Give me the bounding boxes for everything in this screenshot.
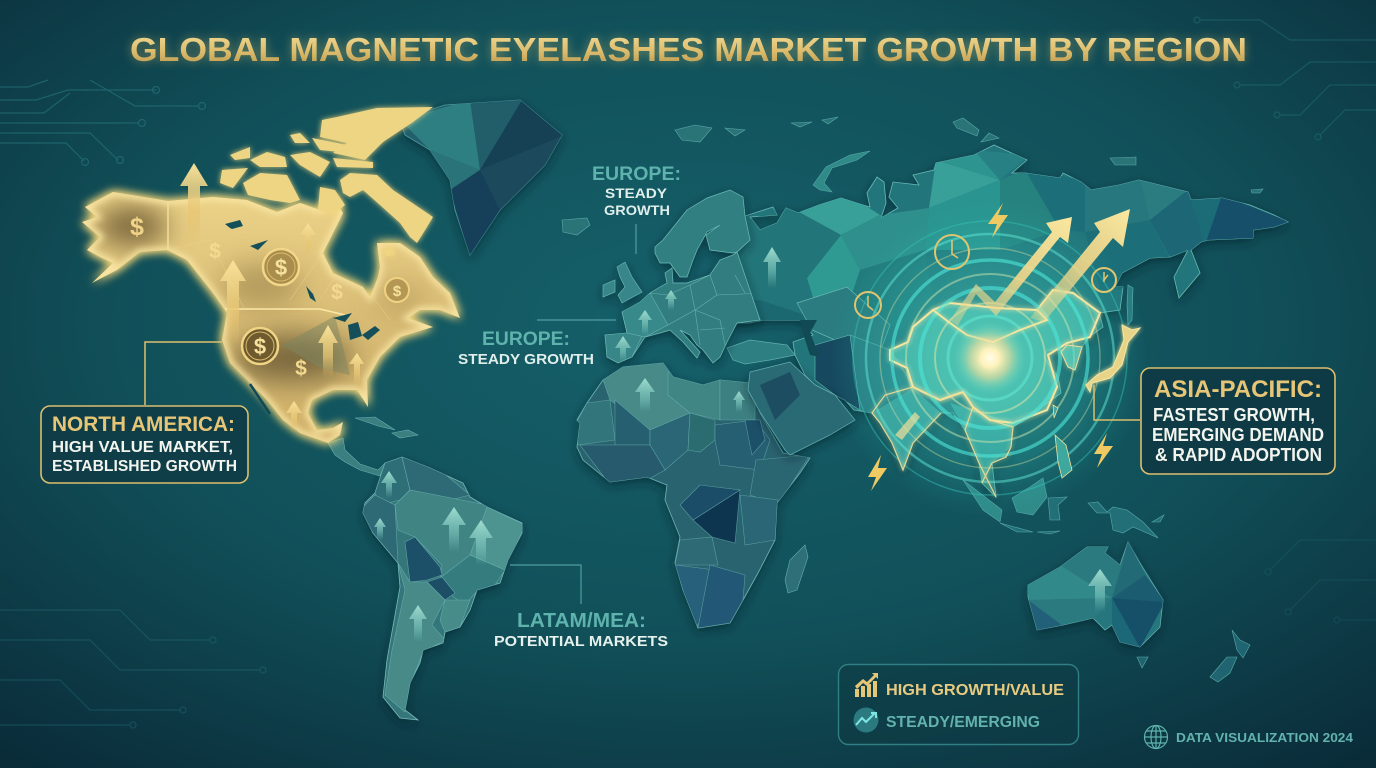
Britain <box>617 262 642 303</box>
region: Asia-Pacific glow <box>830 198 1150 518</box>
icon: dollar: $ <box>295 357 307 380</box>
callout: Asia-Pacific <box>1141 368 1335 474</box>
title: GLOBAL MAGNETIC EYELASHES MARKET GROWTH BY REGION <box>130 31 1247 68</box>
icon: up arrow Spain <box>615 336 631 362</box>
footer: data visualization credit <box>1144 726 1354 748</box>
Turkey and Caucasus <box>727 340 795 364</box>
callout: Asia-Pacific: FASTEST GROWTH, <box>1153 405 1315 425</box>
label: Europe (upper): EUROPE: <box>592 164 681 185</box>
label: Europe (lower): EUROPE: <box>482 329 570 350</box>
icon: high growth bars <box>855 673 878 697</box>
Central America and Caribbean <box>328 417 418 476</box>
label: LATAM/MEA: LATAM/MEA: <box>517 610 646 632</box>
glowing core <box>954 322 1026 394</box>
icon: dollar: $ <box>209 240 221 263</box>
callout: North America: HIGH VALUE MARKET, <box>52 439 233 456</box>
arctic islands <box>220 107 433 256</box>
label: Europe (lower): STEADY GROWTH <box>458 351 594 368</box>
Madagascar <box>785 545 808 593</box>
connector: North America <box>145 342 222 405</box>
Arabia <box>748 362 855 455</box>
lakes <box>225 220 380 340</box>
China fill and outline <box>890 290 1100 423</box>
islands: New Zealand and Tasmania <box>1137 630 1250 682</box>
region: Africa <box>575 362 810 628</box>
icon: dollar: $ <box>130 213 144 241</box>
legend <box>838 664 1078 744</box>
Europe facets and borders <box>606 275 751 363</box>
icon: up arrow Africa <box>635 378 655 412</box>
icon: up arrow Australia <box>1088 569 1112 612</box>
label: Europe (lower) <box>458 320 616 368</box>
icon: globe <box>1144 726 1168 748</box>
icon: coin: $ <box>393 283 402 300</box>
Japan <box>1086 325 1140 392</box>
icon: up arrow Africa <box>733 391 745 412</box>
callout: North America: NORTH AMERICA: <box>52 413 235 436</box>
icon: up arrow South America <box>469 520 493 565</box>
icon: lightning bolt <box>868 455 887 491</box>
Ireland <box>603 280 615 297</box>
icon: lightning bolt <box>1094 433 1113 468</box>
region: small arctic islands <box>562 117 1263 235</box>
Scandinavia and Finland <box>655 190 750 277</box>
callout: Asia-Pacific: EMERGING DEMAND <box>1152 425 1324 445</box>
big growth arrow 1 <box>950 217 1072 325</box>
icon: lightning bolt <box>988 203 1008 238</box>
legend: STEADY/EMERGING <box>886 714 1040 731</box>
icon: clock <box>935 235 969 269</box>
connector: Asia-Pacific <box>1094 385 1140 420</box>
icon: up arrow Germany <box>665 290 677 310</box>
interior shading <box>82 192 460 443</box>
icon: up arrow South America <box>381 471 397 498</box>
region: Australia <box>1025 540 1165 648</box>
mainland Europe <box>605 252 760 363</box>
region: Eurasia and Russia <box>700 145 1290 497</box>
Asia facets <box>700 150 1290 483</box>
icon: clock <box>1092 268 1116 292</box>
icon: coin <box>385 278 409 302</box>
label: Europe (upper): STEADY <box>605 185 668 201</box>
callout: Asia-Pacific: & RAPID ADOPTION <box>1155 445 1322 465</box>
circuit decoration: top left <box>0 80 206 166</box>
Africa countries <box>575 362 810 628</box>
halo <box>830 198 1150 518</box>
icon: dollar: $ <box>331 281 343 304</box>
label: Europe (upper) <box>592 164 681 254</box>
concentric rings <box>853 221 1127 495</box>
icon: up arrow <box>180 163 208 245</box>
South America countries <box>360 457 525 712</box>
region: Europe <box>603 190 770 363</box>
circuit decoration: bottom left <box>0 610 266 728</box>
growth arrows and dollar markers <box>130 163 409 432</box>
icon: up arrow <box>220 260 246 345</box>
label: LATAM/MEA <box>494 565 668 650</box>
legend: HIGH GROWTH/VALUE <box>886 682 1064 699</box>
Caspian Sea <box>800 320 820 357</box>
Philippines and Taiwan <box>1053 405 1072 478</box>
icon: up arrow South America <box>442 507 466 552</box>
callout: North America: ESTABLISHED GROWTH <box>52 458 237 475</box>
circuit decoration: top right <box>1194 17 1376 140</box>
icon: up arrow France <box>638 310 652 335</box>
mainland <box>82 192 460 443</box>
islands: Indonesia and Papua <box>963 478 1164 538</box>
icon: up arrow <box>349 353 364 388</box>
region: South America <box>360 457 525 720</box>
callout: North America <box>41 406 248 483</box>
teal growth arrows <box>374 247 781 642</box>
icon: up arrow South America <box>409 605 427 642</box>
icon: coin <box>242 328 278 364</box>
Korea <box>1061 345 1082 370</box>
label: Europe (upper): GROWTH <box>604 202 670 218</box>
icon: up arrow <box>286 401 302 432</box>
island: Sakhalin <box>1127 285 1133 325</box>
Baja gulf <box>250 384 270 414</box>
icon: coin <box>263 249 299 285</box>
small India arrow streak <box>895 412 920 440</box>
circuit decoration: bottom right <box>1265 540 1376 623</box>
big growth arrow 2 <box>1030 209 1130 322</box>
region: Greenland <box>400 95 565 258</box>
footer: data visualization credit: DATA VISUALIZATION 2024 <box>1176 730 1354 745</box>
icon: coin: $ <box>275 255 287 280</box>
icon: steady trend badge <box>854 708 878 732</box>
South and Southeast Asia outline <box>872 387 1013 497</box>
icon: up arrow <box>300 223 316 256</box>
bright rim <box>82 192 460 443</box>
Mongolia border <box>933 310 1047 342</box>
label: LATAM/MEA: POTENTIAL MARKETS <box>494 633 668 650</box>
icon: up arrow South America <box>374 518 386 540</box>
icon: clock <box>855 292 881 318</box>
icon: up arrow Russia <box>763 247 781 288</box>
icon: up arrow <box>318 325 338 378</box>
callout: Asia-Pacific: ASIA-PACIFIC: <box>1154 376 1322 403</box>
region: North America (gold) <box>82 107 460 443</box>
icon: coin: $ <box>254 334 266 359</box>
